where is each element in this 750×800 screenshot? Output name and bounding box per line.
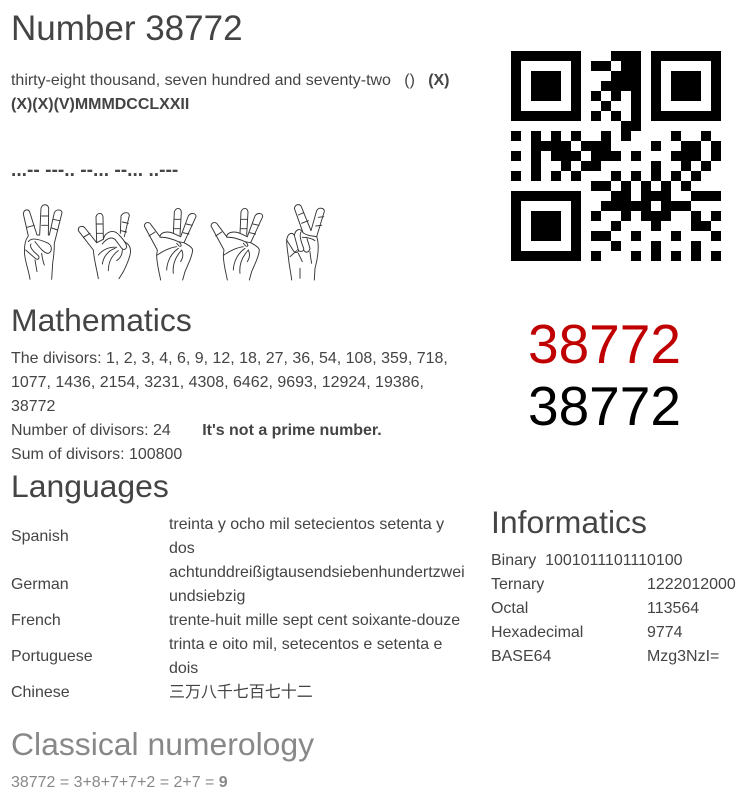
- language: Portuguese: Portuguese: [11, 648, 93, 665]
- informatics table: Mzg3NzI=: [647, 648, 719, 665]
- heading: mathematics: Mathematics: [11, 302, 192, 338]
- number in words and roman numeral: (X)(X)(V)MMMDCCLXXII: [11, 96, 189, 113]
- language: German: German: [11, 576, 69, 593]
- ternary: Ternary: [491, 576, 544, 593]
- octal: Octal: [491, 600, 528, 617]
- translation: Portuguese: trinta e oito mil, setecentos e setenta e: [169, 636, 442, 653]
- mathematics text block: Sum of divisors: 100800: [11, 446, 182, 463]
- mathematics text block: The divisors: 1, 2, 3, 4, 6, 9, 12, 18, 27, 36, 54, 108, 359, 718,: [11, 350, 448, 367]
- translation: Spanish: [169, 516, 444, 557]
- language: Chinese: Chinese: [11, 684, 70, 701]
- numerology sum: 38772 = 3+8+7+7+2 = 2+7 = 9: [11, 774, 228, 791]
- heading: classical numerology: Classical numerology: [11, 726, 314, 762]
- informatics table: [491, 552, 736, 665]
- heading: languages: Languages: [11, 468, 169, 504]
- heading: informatics: Informatics: [491, 504, 647, 540]
- number in words and roman numeral: [11, 72, 450, 113]
- mathematics text block: 1077, 1436, 2154, 3231, 4308, 6462, 9693, 12924, 19386,: [11, 374, 424, 391]
- language: French: French: [11, 612, 61, 629]
- translation: Portuguese: dois: [169, 660, 198, 677]
- mathematics text block: Number of divisors: 24 It's not a prime number.: [11, 422, 382, 439]
- translation: Portuguese: [169, 636, 442, 677]
- hexadecimal: [491, 624, 683, 641]
- icon: sign language hands: [22, 204, 325, 280]
- morse code: ...-- ---.. --... --... ..---: [11, 160, 178, 181]
- red number: 38772: [528, 313, 681, 375]
- black number: 38772: [528, 375, 681, 437]
- languages table: [11, 516, 465, 701]
- translation: Chinese: 三万八千七百七十二: [169, 684, 313, 701]
- translation: German: undsiebzig: [169, 588, 245, 605]
- hexadecimal: Hexadecimal: [491, 624, 583, 641]
- icon: hand digit 7: [144, 208, 196, 280]
- title: Number 38772: [11, 9, 243, 48]
- icon: hand digit 7: [211, 208, 263, 280]
- icon: hand digit 3: [23, 205, 62, 279]
- icon: hand digit 8: [78, 213, 130, 279]
- ternary: [491, 576, 736, 593]
- translation: German: achtunddreißigtausendsiebenhundertzwei: [169, 564, 465, 581]
- translation: German: [169, 564, 465, 605]
- number in words and roman numeral: thirty-eight thousand, seven hundred and seventy-two () (X): [11, 72, 450, 89]
- language: Spanish: Spanish: [11, 528, 69, 545]
- qr code: [511, 51, 721, 261]
- mathematics text block: 38772: [11, 398, 55, 415]
- mathematics text block: [11, 350, 448, 463]
- base64: BASE64: [491, 648, 551, 665]
- informatics table: 1222012000: [647, 576, 736, 593]
- informatics table: 9774: [647, 624, 683, 641]
- base64: [491, 648, 719, 665]
- translation: Spanish: treinta y ocho mil setecientos setenta y: [169, 516, 444, 533]
- translation: Spanish: dos: [169, 540, 195, 557]
- icon: hand digit 2: [287, 205, 324, 280]
- informatics table: 113564: [647, 600, 699, 617]
- translation: French: trente-huit mille sept cent soixante-douze: [169, 612, 460, 629]
- octal: [491, 600, 699, 617]
- binary: Binary 1001011101110100: [491, 552, 682, 569]
